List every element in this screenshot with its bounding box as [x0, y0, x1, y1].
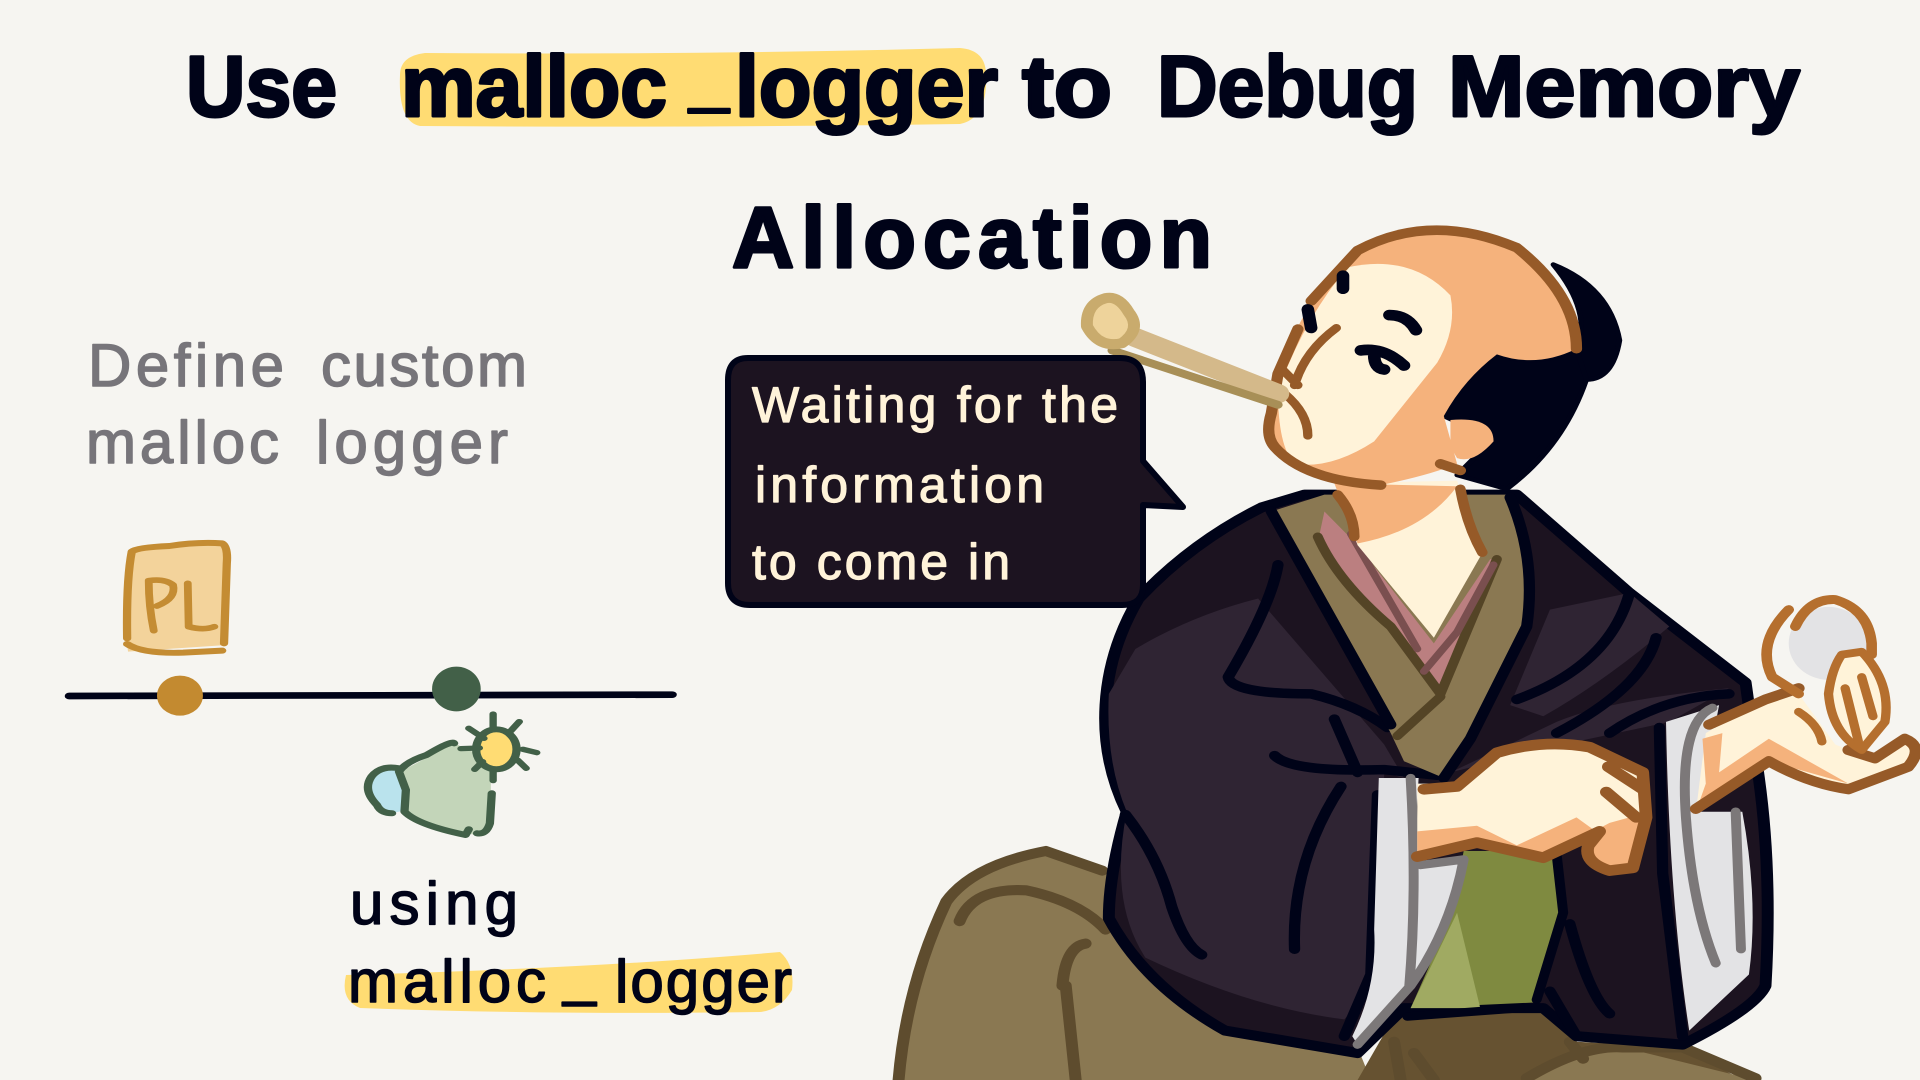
text: define custom malloc logger: custom: [321, 332, 527, 399]
left sleeve cuff: [1352, 778, 1464, 1045]
coin: [1789, 607, 1868, 680]
neck shadow: [1334, 483, 1457, 543]
collar: [1271, 495, 1533, 778]
green hem: [1407, 854, 1563, 1017]
icon: bug on bubble: [368, 714, 537, 835]
right hand: [1696, 600, 1916, 812]
title: Debug: [1157, 39, 1418, 135]
topknot: [1553, 265, 1620, 380]
green marker: [432, 667, 481, 711]
robe: [1105, 495, 1768, 1053]
speech bubble: information: [755, 457, 1044, 513]
green highlight: [1411, 913, 1480, 1008]
pipe: [1087, 298, 1278, 405]
text: using malloc_logger: _: [562, 940, 598, 1007]
title: Allocation: [732, 190, 1212, 286]
orange marker: [157, 676, 203, 716]
timeline diagram: [69, 543, 672, 835]
text: using malloc_logger: logger: [615, 948, 792, 1015]
title: Memory: [1448, 39, 1800, 135]
speech bubble: Waiting for the: [752, 377, 1118, 433]
text: define custom malloc logger: Define: [88, 332, 284, 399]
text: define custom malloc logger: logger: [316, 409, 508, 476]
icon: PL tag: [126, 543, 227, 653]
text: define custom malloc logger: [86, 332, 527, 476]
text: using malloc_logger: using: [350, 870, 518, 937]
ear: [1450, 419, 1494, 459]
hair: [1444, 349, 1586, 489]
text: using malloc_logger: [345, 870, 792, 1015]
title: Use: [186, 39, 337, 135]
timeline line: [69, 695, 672, 696]
text: using malloc_logger: malloc: [348, 948, 546, 1015]
neck: [1334, 481, 1484, 638]
speech bubble: to come in: [752, 534, 1010, 590]
neck lines: [1338, 489, 1482, 552]
face marks: [1308, 276, 1416, 369]
text: define custom malloc logger: malloc: [86, 409, 279, 476]
right sleeve cuff: [1666, 705, 1753, 1031]
figure: man with pipe: [897, 230, 1916, 1080]
green under-robe: [1411, 851, 1560, 1008]
speech bubble: [728, 358, 1183, 605]
title: [186, 25, 1800, 286]
pants: [897, 851, 1756, 1080]
title: malloc: [401, 39, 667, 135]
title: logger: [735, 39, 998, 135]
title: to: [1022, 39, 1112, 135]
left hand: [1417, 744, 1646, 871]
head: [1269, 230, 1576, 485]
title: _: [688, 25, 730, 121]
